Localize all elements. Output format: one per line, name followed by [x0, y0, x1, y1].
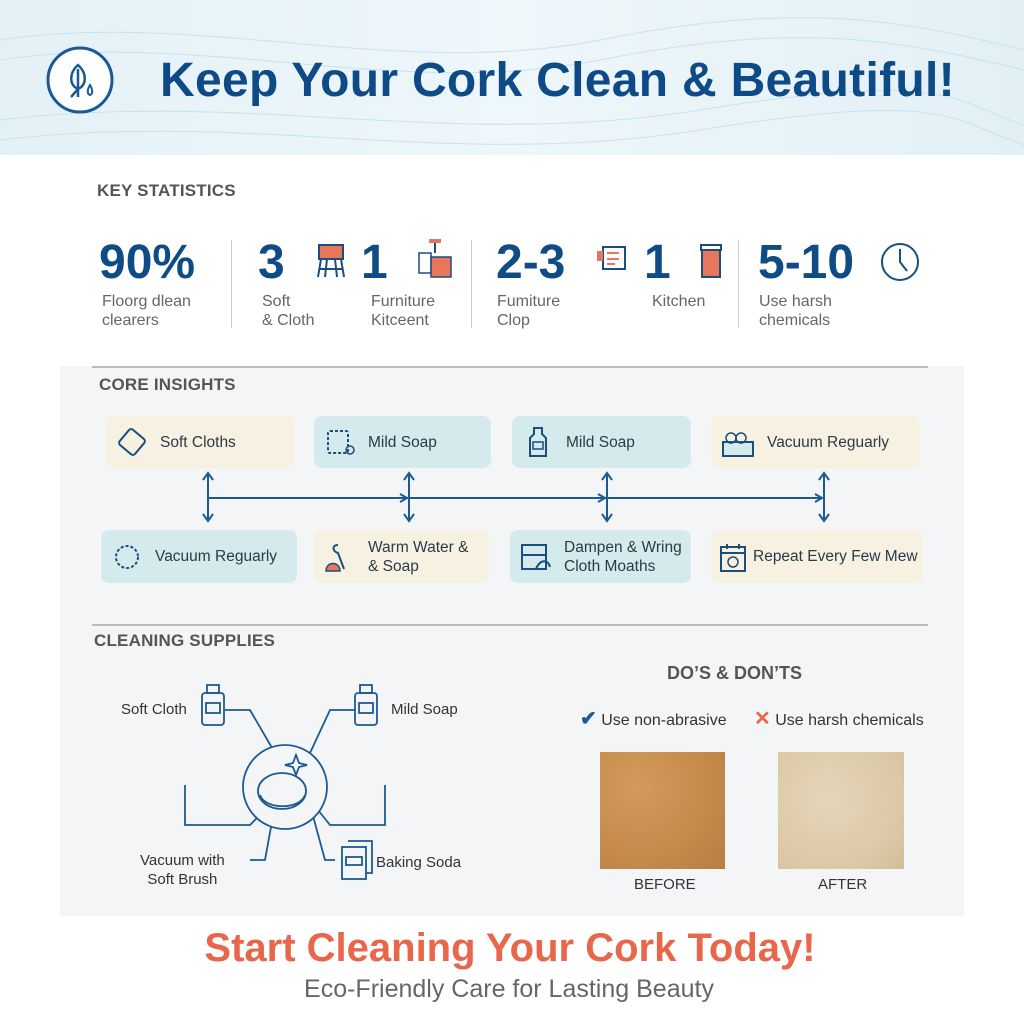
box: soft cloths — [106, 416, 294, 468]
heading: core insights: CORE INSIGHTS — [99, 375, 236, 394]
heading: do's and don'ts: DO’S & DON’TS — [667, 663, 802, 683]
label: vacuum: Soft Brush — [147, 871, 217, 888]
insight boxes — [101, 416, 923, 583]
stats row: 1 — [644, 236, 671, 289]
do item: ✔ Use non-abrasive — [580, 708, 727, 730]
label: before: BEFORE — [634, 876, 696, 893]
label: mild soap: Mild Soap — [391, 701, 458, 718]
label: baking soda: Baking Soda — [376, 854, 461, 871]
box: warm water: & Soap — [368, 558, 419, 574]
stat 5-10: 5-10 — [758, 236, 854, 289]
stats row: chemicals — [759, 312, 830, 329]
header band — [0, 0, 1024, 155]
stat 1: 1 — [361, 236, 388, 289]
box: vacuum regularly top — [711, 416, 920, 468]
stats row: & Cloth — [262, 312, 314, 329]
box: mild soap 2: Mild Soap — [566, 434, 635, 450]
stat 90%: 90% — [99, 236, 195, 289]
box: repeat — [711, 530, 923, 583]
stats row: Furniture — [371, 293, 435, 310]
box: soft cloths: Soft Cloths — [160, 434, 236, 450]
stat 2-3: 2-3 — [496, 236, 565, 289]
stats row — [99, 236, 919, 329]
box: vacuum regularly bottom: Vacuum Reguarly — [155, 548, 277, 565]
box: warm water — [314, 530, 489, 583]
stats row: Fumiture — [497, 293, 560, 310]
heading: cleaning supplies: CLEANING SUPPLIES — [94, 631, 275, 650]
box: vacuum regularly top: Vacuum Reguarly — [767, 434, 889, 450]
box: dampen and wring: Cloth Moaths — [564, 558, 655, 574]
stats row: Floorg dlean — [102, 293, 191, 310]
icon: leaf and drop — [46, 46, 114, 114]
image: after cork — [778, 752, 904, 869]
box: mild soap 1: Mild Soap — [368, 434, 437, 450]
footer subtitle: Eco-Friendly Care for Lasting Beauty — [304, 975, 714, 1003]
box: repeat: Repeat Every Few Mew — [753, 548, 918, 565]
stats row: Clop — [497, 312, 530, 329]
arrows: flow connector — [202, 471, 830, 523]
label: after: AFTER — [818, 876, 867, 893]
box: mild soap 2 — [512, 416, 691, 468]
label: soft cloth: Soft Cloth — [121, 701, 187, 718]
label: vacuum — [140, 852, 225, 888]
box: mild soap 1 — [314, 416, 491, 468]
stat 3: 3 — [258, 236, 285, 289]
box: dampen and wring: Dampen & Wring — [564, 538, 682, 556]
box: vacuum regularly bottom — [101, 530, 297, 583]
footer headline: Start Cleaning Your Cork Today! — [204, 926, 816, 970]
dont item: ✕ Use harsh chemicals — [754, 708, 924, 730]
stats row: Kitceent — [371, 312, 429, 329]
stats row: Kitchen — [652, 293, 705, 310]
stats row: Use harsh — [759, 293, 832, 310]
box: dampen and wring — [510, 530, 691, 583]
box: warm water: Warm Water & — [368, 538, 468, 556]
image: before cork — [600, 752, 725, 869]
label: vacuum: Vacuum with — [140, 852, 225, 869]
stats row: Soft — [262, 293, 290, 310]
supplies diagram — [121, 684, 462, 888]
panel: core insights and supplies — [60, 366, 964, 916]
stats row: clearers — [102, 312, 159, 329]
title: Keep Your Cork Clean & Beautiful! — [160, 54, 955, 107]
heading: key statistics: KEY STATISTICS — [97, 181, 236, 200]
